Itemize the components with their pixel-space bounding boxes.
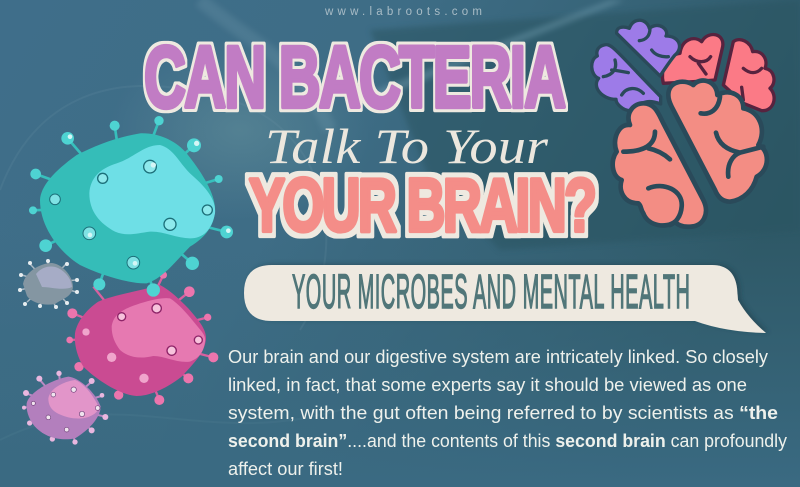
body text: affect our first! [228, 459, 343, 479]
body text [228, 347, 787, 479]
title: your brain: YOUR BRAIN? [249, 163, 597, 247]
body text: linked, in fact, that some experts say it should be viewed as one [228, 375, 747, 395]
bacterium: pink [66, 271, 218, 405]
bacterium: purple small [22, 371, 108, 445]
subtitle speech bubble: YOUR MICROBES AND MENTAL HEALTH [292, 265, 690, 318]
icon: brain [592, 20, 774, 227]
bacterium: teal [29, 116, 233, 297]
title: can bacteria: CAN BACTERIA [144, 28, 566, 126]
body text: Our brain and our digestive system are intricately linked. So closely [228, 347, 768, 367]
body text: system, with the gut often being referred to by scientists as “the [228, 403, 778, 423]
body text: second brain”....and the contents of this second brain can profoundly [228, 431, 787, 451]
website url: www.labroots.com [324, 6, 482, 18]
title: talk to your: Talk To Your [265, 118, 549, 174]
bacterium: grey small [18, 259, 79, 309]
subtitle speech bubble [244, 265, 766, 333]
